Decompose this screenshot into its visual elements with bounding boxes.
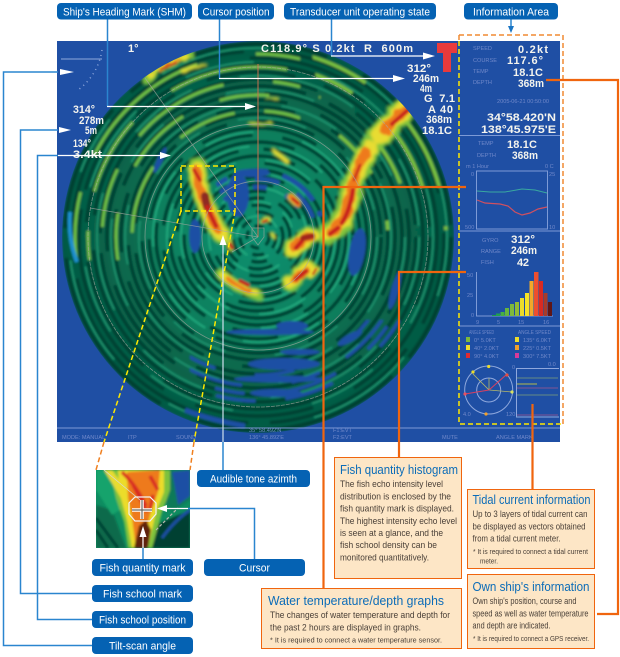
screen status bar: MUTE <box>442 435 458 441</box>
own ship information panel <box>459 41 560 136</box>
fish quantity histogram: 0 <box>471 313 474 319</box>
label: Fish quantity mark <box>92 559 193 576</box>
cursor readouts: A 40 <box>428 104 453 116</box>
connector: fish quantity histogram <box>399 272 466 457</box>
callout: Water temperature/depth graphs: Water temperature/depth graphs <box>268 594 444 608</box>
callout: Tidal current information <box>468 490 594 568</box>
label: Audible tone azimth <box>197 470 310 487</box>
screen status bar: SOUND <box>176 435 196 441</box>
callout: Fish quantity histogram: Fish quantity histogram <box>340 463 458 477</box>
callout: Tidal current information: from a tidal current meter. <box>472 534 560 544</box>
left readouts: 5m <box>85 125 97 137</box>
own ship information panel: 0.2kt <box>518 44 548 56</box>
water temperature and depth graph: 0 <box>471 172 474 178</box>
connector: tilt-scan angle <box>4 69 92 646</box>
fish quantity histogram: 9 <box>476 320 479 326</box>
tidal current information: 225° 0.5KT <box>523 346 552 352</box>
fish quantity histogram: 16 <box>543 320 549 326</box>
screen status bar: ANGLE MARK <box>496 435 533 441</box>
callout: Fish quantity histogram: The highest intensity echo level <box>340 516 457 526</box>
screen status bar: 136° 45.892'E <box>249 435 284 441</box>
own ship information panel: 18.1C <box>513 67 543 79</box>
fish school dashed highlight and projection <box>96 166 235 470</box>
tidal current information: ANGLE SPEED <box>518 330 551 336</box>
callout: Tidal current information: be displayed as vectors obtained <box>472 522 586 532</box>
fish quantity histogram: 5 <box>497 320 500 326</box>
callout: Fish quantity histogram: The fish echo intensity level <box>340 479 443 489</box>
water temperature and depth graph: TEMP <box>478 141 494 147</box>
tidal current information: 0.0 <box>548 362 556 368</box>
connector: fish school position <box>38 152 171 620</box>
transducer state mark <box>437 43 457 72</box>
label: Transducer unit operating state: Transducer unit operating state <box>290 6 430 18</box>
left readouts <box>73 43 139 161</box>
label: Fish quantity mark: Fish quantity mark <box>100 562 186 574</box>
panel dividers <box>459 136 560 326</box>
tidal current information: 300° 7.5KT <box>523 354 552 360</box>
fish quantity histogram: 50 <box>467 273 473 279</box>
connector: tidal current <box>531 404 534 489</box>
echo hot spots <box>146 54 418 295</box>
label: Tilt-scan angle <box>92 637 193 654</box>
fish quantity pointer arrow <box>140 526 146 559</box>
connector: fish school mark <box>20 127 92 594</box>
callout: Water temperature/depth graphs: The changes of water temperature and depth for <box>270 610 450 620</box>
callout: Fish quantity histogram <box>334 458 462 578</box>
tidal current information: 135° 6.0KT <box>523 338 552 344</box>
label: Fish school position: Fish school position <box>99 614 186 626</box>
own ship information panel: TEMP <box>473 69 489 75</box>
water temperature and depth graph: 10 <box>549 225 555 231</box>
callout: Tidal current information: meter. <box>480 556 498 566</box>
label: Transducer unit operating state <box>284 3 436 20</box>
cursor readouts: 246m <box>413 73 439 85</box>
own ship information panel: 34°58.420'N <box>487 112 556 124</box>
tidal current information: 0 <box>512 365 515 371</box>
label: Cursor: Cursor <box>239 562 270 574</box>
connector: transducer state <box>331 19 435 60</box>
screen status bar: F2:EVT <box>333 435 353 441</box>
left readouts: 314° <box>73 104 95 116</box>
screen status bar: ITP <box>128 435 137 441</box>
cursor readouts: G 7.1 <box>424 93 455 105</box>
fish quantity histogram: FISH <box>481 260 494 266</box>
callout: Own ship's information: Own ship's position, course and <box>472 596 576 606</box>
own ship information panel: 2005-06-21 00:50:00 <box>497 99 549 105</box>
tidal current information: 120 <box>506 412 515 418</box>
tidal current information: 4.0 <box>463 412 471 418</box>
callout: Fish quantity histogram: distribution is enclosed by the <box>340 492 451 502</box>
own ship information panel: 138°45.975'E <box>481 124 556 136</box>
label: Audible tone azimth: Audible tone azimth <box>210 474 297 486</box>
left readouts: 134° <box>73 138 91 150</box>
water temperature and depth graph: 500 <box>465 225 474 231</box>
connector: audible tone azimuth <box>220 235 226 470</box>
left readouts: 278m <box>79 115 104 127</box>
callout: Own ship's information: Own ship's information <box>472 580 590 594</box>
cursor readouts: 18.1C <box>422 125 452 137</box>
callout: Water temperature/depth graphs: * It is required to connect a water temperature sensor. <box>270 636 442 644</box>
cursor readouts: 368m <box>426 114 452 126</box>
cursor pointer arrow <box>157 505 254 559</box>
fish quantity histogram: RANGE <box>481 249 501 255</box>
connector: ship's heading mark <box>107 19 256 110</box>
callout: Tidal current information: Up to 3 layers of tidal current can <box>472 509 588 519</box>
water temperature and depth graph: m 1 Hour <box>466 164 489 170</box>
label: Cursor position <box>198 3 274 20</box>
water temperature and depth graph: DEPTH <box>477 153 496 159</box>
label: Information Area: Information Area <box>473 6 550 18</box>
connector: information area arrow <box>508 19 514 33</box>
left readouts: 3.4kt <box>73 149 102 161</box>
own ship information panel: DEPTH <box>473 80 492 86</box>
cursor readouts: 312° <box>407 63 431 75</box>
tidal current information: ANGLE SPEED <box>469 330 494 336</box>
cursor readouts: 4m <box>420 83 432 95</box>
water temperature and depth graph: 18.1C <box>507 139 537 151</box>
callout: Fish quantity histogram: monitored quantitatively. <box>340 552 429 562</box>
fish school mark and cursor on inset <box>129 497 156 521</box>
tidal current information <box>463 330 559 418</box>
callout: Own ship's information: * It is required to connect a GPS receiver. <box>473 634 589 643</box>
connector: cursor position <box>219 19 405 82</box>
water temperature and depth graph <box>465 139 555 231</box>
water temperature and depth graph: 0 C <box>545 164 554 170</box>
fish quantity histogram: 42 <box>517 257 529 269</box>
range rings and bearing lines <box>88 67 428 407</box>
callout: Fish quantity histogram: fish quantity mark is displayed. <box>340 504 454 514</box>
top screen readout: C118.9° S 0.2kt R 600m <box>261 43 413 55</box>
callout: Own ship's information: speed as well as water temperature <box>472 608 588 618</box>
fish quantity histogram: GYRO <box>482 238 499 244</box>
cursor readouts <box>407 63 455 137</box>
callout: Water temperature/depth graphs: the past 2 hours are displayed in graphs. <box>270 622 421 632</box>
screen status bar: F1:EVT <box>333 428 353 434</box>
screen status bar <box>57 428 560 441</box>
callout: Own ship's information: and depth are indicated. <box>472 620 550 630</box>
callout: Own ship's information <box>468 574 594 648</box>
callout: Tidal current information: * It is required to connect a tidal current <box>473 547 588 556</box>
label: Tilt-scan angle: Tilt-scan angle <box>109 640 176 652</box>
label: Fish school mark: Fish school mark <box>103 588 182 600</box>
label: Cursor <box>204 559 305 576</box>
information area dashed frame <box>459 35 563 424</box>
fish quantity histogram: 15 <box>518 320 524 326</box>
tidal current information: 90° 4.0KT <box>474 354 500 360</box>
blue gap patches <box>151 146 404 397</box>
label: Cursor position: Cursor position <box>202 6 270 18</box>
fish quantity histogram: 246m <box>511 245 537 257</box>
callout: Fish quantity histogram: is seen at a glance, and the <box>340 528 443 538</box>
screen status bar: MODE: MANUAL <box>62 435 105 441</box>
label: Ship's Heading Mark: Ship's Heading Mark (SHM) <box>63 6 186 18</box>
left readouts: 1° <box>128 43 139 55</box>
label: Ship's Heading Mark <box>57 3 192 20</box>
own ship information panel: 117.6° <box>507 55 543 67</box>
connector: own ship information <box>546 80 618 614</box>
own ship information panel: COURSE <box>473 58 497 64</box>
label: Fish school position <box>92 611 193 628</box>
callout: Water temperature/depth graphs <box>262 588 462 648</box>
tilt-scan arc scale <box>61 50 102 90</box>
connector: water temperature graphs <box>324 187 466 588</box>
tidal current information: 40° 2.0KT <box>474 346 500 352</box>
screen status bar: 35° 58.492'N <box>249 428 281 434</box>
water temperature and depth graph: 25 <box>549 172 555 178</box>
own ship information panel: 368m <box>518 78 544 90</box>
water temperature and depth graph: 368m <box>512 150 538 162</box>
callout: Fish quantity histogram: fish school density can be <box>340 540 437 550</box>
sonar echo disk <box>62 41 454 433</box>
label: Fish school mark <box>92 585 193 602</box>
callout: Tidal current information: Tidal current information <box>472 493 590 507</box>
tidal current information: 0° 5.0KT <box>474 338 496 344</box>
label: Information Area <box>464 3 558 20</box>
inset: fish school enlargement <box>96 470 190 548</box>
fish quantity histogram: 312° <box>511 234 535 246</box>
fish quantity histogram <box>467 234 553 326</box>
fish quantity histogram: 25 <box>467 293 473 299</box>
own ship information panel: SPEED <box>473 46 492 52</box>
ship's heading line <box>257 64 259 237</box>
sonar screen <box>57 41 560 442</box>
